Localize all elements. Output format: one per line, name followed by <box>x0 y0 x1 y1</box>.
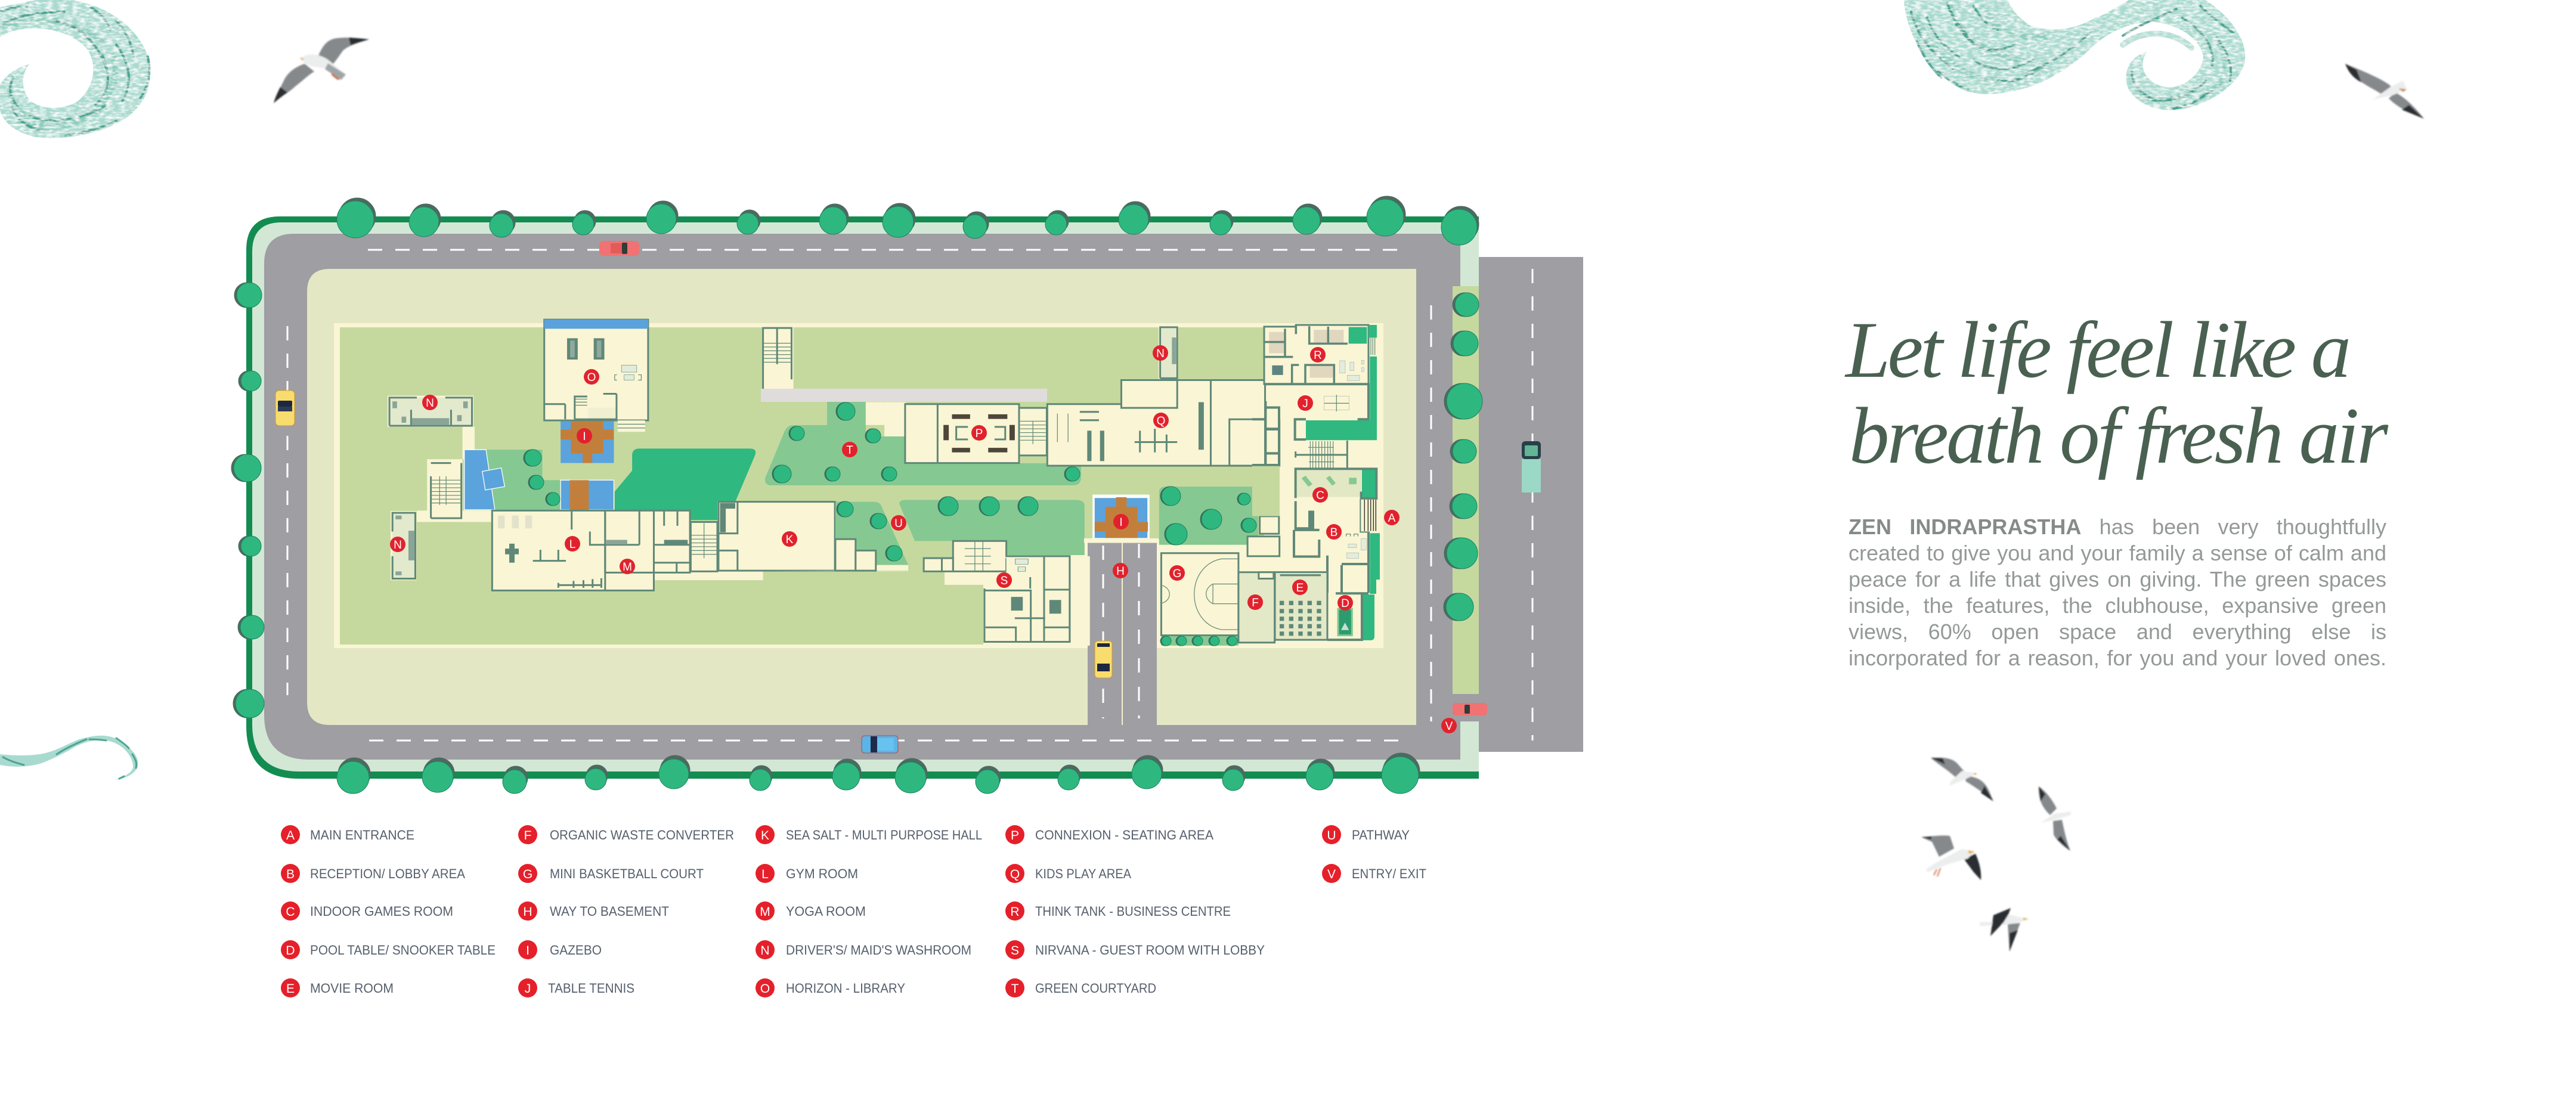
legend column 1: POOL TABLE/ SNOOKER TABLE <box>310 943 496 958</box>
body paragraph: views, 60% open space and everything else is <box>1849 619 2386 644</box>
title <box>1844 306 2388 481</box>
kids play block <box>1047 380 1280 466</box>
legend column 5: V <box>1327 867 1336 881</box>
legend column 4: Q <box>1010 867 1020 881</box>
legend column 3: SEA SALT - MULTI PURPOSE HALL <box>786 828 982 842</box>
left wing of plan <box>388 320 835 590</box>
car: red at entry <box>1453 703 1487 715</box>
legend column 2: ORGANIC WASTE CONVERTER <box>550 828 734 842</box>
map location markers: H <box>1116 565 1125 578</box>
legend column 1: INDOOR GAMES ROOM <box>310 904 453 919</box>
legend <box>281 825 1426 997</box>
body paragraph: peace for a life that gives on giving. The green spaces <box>1849 567 2386 591</box>
map location markers: O <box>587 371 596 384</box>
plot sage area <box>340 327 1264 645</box>
map location markers: B <box>1330 526 1337 539</box>
legend column 3: YOGA ROOM <box>786 904 866 919</box>
map location markers: D <box>1341 597 1349 610</box>
map location markers: U <box>894 518 903 530</box>
legend column 1: D <box>286 944 295 958</box>
legend column 2: G <box>523 867 532 881</box>
legend column 5 <box>1322 825 1426 883</box>
reception block <box>1294 499 1368 593</box>
map location markers: P <box>976 427 983 440</box>
entry road link <box>1453 694 1482 721</box>
map location markers: N <box>394 539 402 552</box>
legend column 1: E <box>286 982 295 996</box>
legend column 1: C <box>286 905 295 919</box>
stairs centre <box>691 522 717 571</box>
sea salt hall <box>719 502 835 571</box>
courtyard trees <box>525 402 1256 646</box>
legend column 5: ENTRY/ EXIT <box>1352 866 1426 881</box>
legend column 1: MAIN ENTRANCE <box>310 828 414 842</box>
map location markers: T <box>846 444 853 457</box>
bird: top left seagull <box>274 38 369 103</box>
road markings <box>287 250 1532 741</box>
sage strip by main road <box>1453 286 1479 694</box>
lawn <box>307 269 1416 725</box>
guest rooms block <box>924 541 1070 642</box>
small stores near court <box>1247 516 1280 556</box>
seagull four <box>1980 908 2029 952</box>
indoor games room <box>1296 469 1376 498</box>
roadside trees top <box>337 199 1477 245</box>
map location markers: R <box>1314 349 1322 362</box>
bushes row <box>1161 636 1239 646</box>
legend column 3: K <box>761 829 769 842</box>
roadside trees right <box>1446 293 1482 621</box>
gazebo lower <box>1092 495 1150 540</box>
legend column 1: MOVIE ROOM <box>310 981 394 996</box>
main entrance steps <box>1361 500 1376 531</box>
map location markers: N <box>426 397 434 410</box>
legend column 3: M <box>760 905 770 919</box>
cream lower right court <box>983 540 1270 648</box>
seating area block <box>866 402 1019 463</box>
legend column 1: RECEPTION/ LOBBY AREA <box>310 866 465 881</box>
wave: left middle ribbon <box>0 736 138 780</box>
title: Let life feel like a <box>1844 306 2351 395</box>
truck: main road <box>1522 441 1541 492</box>
pale verge <box>252 222 1479 772</box>
legend column 4: T <box>1011 982 1019 996</box>
outer boundary band <box>246 216 1479 779</box>
pond with walkway <box>561 480 614 510</box>
connecting paths <box>417 427 763 580</box>
library building <box>544 320 648 432</box>
legend column 4: THINK TANK - BUSINESS CENTRE <box>1035 904 1231 919</box>
bird: top right seagull <box>2345 64 2424 119</box>
wave: top left swirl <box>0 0 150 138</box>
map location markers: I <box>583 430 586 443</box>
legend column 1 <box>281 825 496 997</box>
east wing rooms <box>1252 325 1380 640</box>
map location markers: G <box>1173 568 1181 580</box>
legend column 2: J <box>525 982 531 996</box>
map location markers: M <box>623 561 632 574</box>
legend column 5: U <box>1327 829 1336 842</box>
pathway gardens <box>775 327 1370 646</box>
organic waste converter <box>1239 572 1275 643</box>
map location markers <box>390 345 1457 733</box>
roadside trees bottom <box>337 757 1419 794</box>
map location markers: J <box>1302 398 1308 410</box>
perimeter road <box>264 234 1460 760</box>
legend column 3: HORIZON - LIBRARY <box>786 981 905 996</box>
roadside trees left <box>234 283 264 718</box>
legend column 2: WAY TO BASEMENT <box>550 904 669 919</box>
seagull two <box>2039 786 2071 851</box>
pool table room <box>1327 593 1362 640</box>
body paragraph <box>1849 515 2386 670</box>
gym and yoga block <box>492 510 690 590</box>
washroom left <box>391 511 416 580</box>
legend column 3: GYM ROOM <box>786 866 858 881</box>
site plan <box>234 199 1583 794</box>
map location markers: V <box>1445 720 1453 733</box>
legend column 4 <box>1005 825 1265 997</box>
map location markers: S <box>1001 575 1008 587</box>
walkway canopy <box>761 389 1047 402</box>
gazebo upper <box>561 421 614 463</box>
stairs beside seating <box>1019 408 1046 456</box>
legend column 1: B <box>286 867 295 881</box>
legend column 3 <box>756 825 982 997</box>
stairs north <box>762 327 794 389</box>
legend column 2: H <box>523 905 532 919</box>
pool <box>465 450 495 510</box>
legend column 4: P <box>1011 829 1019 842</box>
legend column 3: O <box>760 982 770 996</box>
green edge reception <box>1370 533 1380 594</box>
main road right <box>1479 257 1583 752</box>
seagull three <box>1921 835 1981 880</box>
bird group: four seagulls <box>1921 758 2071 952</box>
small rooms east of hall <box>835 539 876 571</box>
plot border <box>334 323 1383 648</box>
wave: top right swirl <box>1904 0 2245 110</box>
legend column 2 <box>518 825 734 997</box>
body paragraph: inside, the features, the clubhouse, expansive green <box>1849 593 2386 618</box>
pool small <box>482 468 504 490</box>
east lobby cream <box>1280 380 1370 646</box>
title: breath of fresh air <box>1849 392 2388 481</box>
sage pocket near court <box>1252 466 1280 516</box>
washroom top <box>388 396 473 427</box>
map location markers: F <box>1252 597 1259 609</box>
legend column 4: NIRVANA - GUEST ROOM WITH LOBBY <box>1035 943 1265 958</box>
body paragraph: created to give you and your family a sense of calm and <box>1849 541 2386 565</box>
stairs by indoor games <box>1296 441 1347 469</box>
legend column 4: S <box>1011 944 1019 958</box>
think tank <box>1264 325 1377 384</box>
green edge pool room <box>1363 594 1374 640</box>
body paragraph: ZEN INDRAPRASTHA has been very thoughtfully <box>1849 515 2386 539</box>
map location markers: N <box>1156 348 1165 360</box>
legend column 2: GAZEBO <box>550 943 602 958</box>
legend column 2: TABLE TENNIS <box>548 981 634 996</box>
legend column 1: A <box>286 829 295 842</box>
legend column 3: L <box>761 867 769 881</box>
washroom north east <box>1159 327 1178 379</box>
lawn feature <box>615 448 756 520</box>
legend column 4: CONNEXION - SEATING AREA <box>1035 828 1213 842</box>
green courtyard <box>765 402 1081 485</box>
basketball court <box>1161 553 1239 636</box>
stairs at think tank <box>1370 338 1376 355</box>
map location markers: K <box>786 534 794 546</box>
legend column 2: F <box>524 829 531 842</box>
map location markers: Q <box>1157 415 1165 427</box>
legend column 2: MINI BASKETBALL COURT <box>550 866 704 881</box>
legend column 3: N <box>760 944 770 958</box>
car: red top road <box>599 241 639 256</box>
table tennis hall <box>1252 384 1368 465</box>
stairs left <box>431 463 462 518</box>
legend column 4: KIDS PLAY AREA <box>1035 866 1131 881</box>
map location markers: L <box>569 538 575 551</box>
legend column 3: DRIVER'S/ MAID'S WASHROOM <box>786 943 971 958</box>
car: blue bottom road <box>862 736 898 753</box>
map location markers: C <box>1316 489 1324 502</box>
map location markers: I <box>1119 516 1123 529</box>
map location markers: A <box>1388 512 1396 525</box>
legend column 4: GREEN COURTYARD <box>1035 981 1156 996</box>
car: yellow left road <box>275 391 295 426</box>
legend column 5: PATHWAY <box>1352 828 1410 842</box>
legend column 2: I <box>526 944 530 958</box>
seagull one <box>1931 758 1993 801</box>
green edge east <box>1306 357 1377 440</box>
garden beside pool <box>486 450 561 510</box>
body paragraph: incorporated for a reason, for you and your loved ones. <box>1849 646 2386 670</box>
entry road to basement <box>1088 541 1157 725</box>
car: yellow on entry road <box>1095 641 1112 678</box>
map location markers: E <box>1296 582 1304 594</box>
movie room <box>1275 572 1327 640</box>
legend column 4: R <box>1010 905 1020 919</box>
